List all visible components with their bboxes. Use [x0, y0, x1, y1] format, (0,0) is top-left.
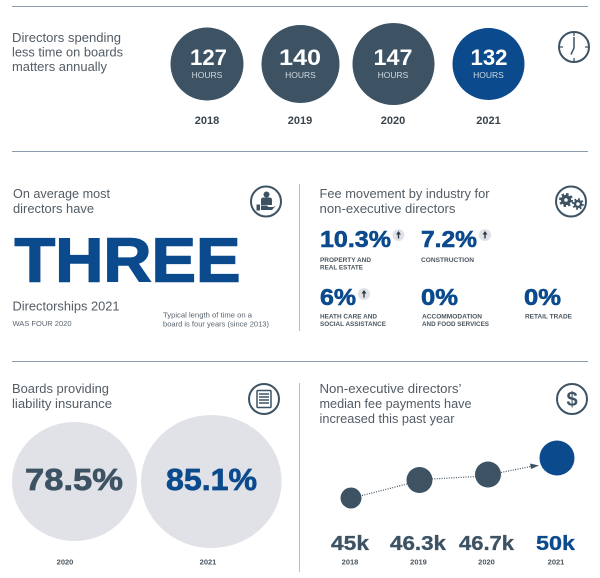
value: 50k 2021: [536, 533, 576, 567]
note: typical board tenure: board is four years (since 2013): [163, 320, 270, 328]
stat: construction 7.2%: 7.2%: [421, 226, 477, 252]
panel: fee movement by industry: [320, 186, 586, 328]
panel: liability insurance: [12, 381, 282, 567]
stat circle: 85.1% in 2021: [141, 415, 282, 567]
value: 45k 2018: [331, 533, 370, 567]
stat: retail trade 0%: RETAIL TRADE: [525, 314, 573, 321]
icon: clock: [559, 32, 589, 62]
stat circle: 78.5% in 2020: 78.5%: [25, 462, 123, 497]
stat: retail trade 0%: [524, 284, 573, 321]
icon: checklist document: [249, 384, 279, 414]
stat: 132 hours 2021: HOURS: [473, 70, 504, 80]
stat: 132 hours 2021: 2021: [476, 115, 501, 127]
stat: property 10.3%: PROPERTY AND: [320, 257, 371, 264]
stat: 140 hours 2019: [262, 25, 340, 127]
value: 50k 2021: 2021: [548, 558, 564, 567]
heading: non-executive directors median fee: [320, 381, 472, 426]
icon: gears: [556, 186, 586, 216]
heading: non-executive directors median fee: Non-executive directors’: [320, 381, 462, 396]
stat: 140 hours 2019: HOURS: [285, 70, 316, 80]
heading: fee movement: Fee movement by industry for: [320, 186, 490, 201]
stat: property 10.3%: REAL ESTATE: [320, 264, 364, 272]
heading: directors spending less time: less time on boards: [12, 44, 123, 60]
heading: directors spending less time: matters annually: [12, 59, 107, 74]
stat: health care 6%: HEATH CARE AND: [320, 314, 377, 321]
label: directorships 2021: Directorships 2021: [12, 298, 120, 314]
heading: boards providing liability insurance: liability insurance: [12, 396, 112, 411]
big word: three: THREE: [14, 226, 240, 296]
stat: 140 hours 2019: 2019: [288, 115, 312, 127]
heading: directors spending less time: [12, 30, 123, 74]
stat: health care 6%: SOCIAL ASSISTANCE: [320, 321, 387, 328]
stat circle: 78.5% in 2020: 2020: [57, 558, 73, 567]
value: 45k 2018: 2018: [342, 558, 358, 567]
line chart: dotted trend: [340, 440, 574, 508]
stat: retail trade 0%: 0%: [524, 284, 561, 310]
stat: 127 hours 2018: [170, 28, 244, 127]
value: 46.7k 2020: 2020: [478, 558, 495, 567]
stat: 147 hours 2020: 147: [374, 45, 412, 70]
stat: 127 hours 2018: 2018: [195, 115, 219, 127]
stat: 147 hours 2020: [352, 23, 434, 127]
value: 46.3k 2019: 46.3k: [390, 533, 447, 555]
stat: property 10.3%: 10.3%: [320, 226, 391, 252]
heading: non-executive directors median fee: median fee payments have: [320, 396, 472, 411]
stat: 127 hours 2018: HOURS: [192, 70, 223, 80]
stat: health care 6%: 6%: [320, 284, 356, 310]
note: typical board tenure: [163, 310, 270, 328]
stat: 127 hours 2018: 127: [190, 45, 227, 70]
stat: 132 hours 2021: [452, 28, 524, 127]
icon: dollar sign: $: [566, 389, 578, 411]
icon: person over hand: [251, 186, 281, 216]
panel: median fee payments: [320, 381, 587, 567]
value: 46.3k 2019: [390, 533, 447, 567]
panel: hours on board matters: [12, 23, 589, 127]
stat: 140 hours 2019: 140: [279, 45, 321, 70]
value: 46.7k 2020: [459, 533, 515, 567]
heading: non-executive directors median fee: increased this past year: [320, 411, 455, 426]
stat: accommodation 0%: AND FOOD SERVICES: [422, 321, 490, 328]
heading: directors spending less time: Directors spending: [12, 30, 121, 45]
heading: fee movement: non-executive directors: [320, 201, 456, 216]
stat: accommodation 0%: 0%: [421, 284, 458, 310]
value: 46.3k 2019: 2019: [410, 558, 427, 567]
note: typical board tenure: Typical length of time on a: [163, 310, 253, 320]
value: 46.7k 2020: 46.7k: [459, 533, 515, 555]
stat: accommodation 0%: ACCOMMODATION: [422, 314, 482, 321]
heading: boards providing liability insurance: [12, 381, 112, 411]
stat circle: 85.1% in 2021: 2021: [200, 558, 216, 567]
icon: dollar sign: [557, 384, 587, 414]
stat: construction 7.2%: [421, 226, 491, 264]
heading: on average most directors have: directors have: [13, 201, 94, 216]
stat: construction 7.2%: CONSTRUCTION: [421, 257, 474, 264]
heading: fee movement: [320, 186, 490, 216]
stat: property 10.3%: [320, 226, 404, 272]
heading: on average most directors have: [13, 186, 110, 216]
stat: health care 6%: [320, 284, 387, 328]
stat: 132 hours 2021: 132: [470, 45, 508, 70]
value: 45k 2018: 45k: [331, 533, 370, 555]
panel: directorships: [12, 186, 281, 328]
stat: accommodation 0%: [421, 284, 490, 328]
stat: 147 hours 2020: 2020: [381, 115, 405, 127]
heading: on average most directors have: On average most: [13, 186, 110, 201]
stat circle: 78.5% in 2020: [12, 422, 137, 567]
heading: boards providing liability insurance: Boards providing: [12, 381, 109, 396]
stat circle: 85.1% in 2021: 85.1%: [166, 462, 257, 497]
label: was four 2020: WAS FOUR 2020: [12, 319, 72, 328]
stat: 147 hours 2020: HOURS: [378, 70, 409, 80]
value: 50k 2021: 50k: [536, 533, 576, 555]
